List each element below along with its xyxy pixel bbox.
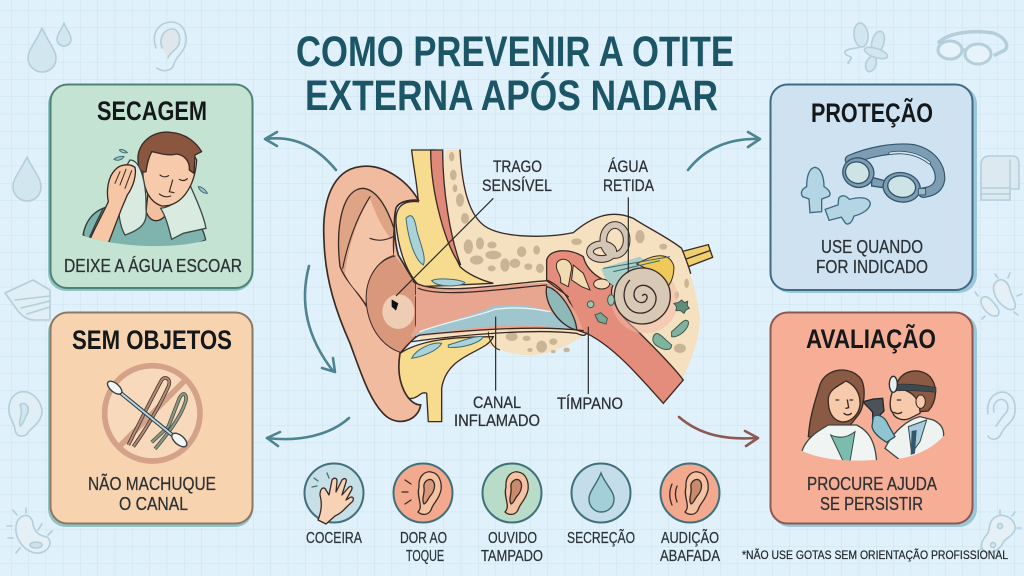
- label: trago sensível: [482, 157, 552, 195]
- label: água retida: RETIDA: [603, 176, 655, 195]
- ear anatomy diagram: [324, 150, 713, 422]
- illustration: goggles and earplugs: [801, 149, 940, 229]
- text: audição abafada: AUDIÇÃO: [661, 530, 719, 547]
- icon: small water drop: [57, 23, 71, 46]
- water highlight: [420, 308, 550, 332]
- panel: secagem: [48, 84, 253, 291]
- label: trago sensível: TRAGO: [493, 157, 542, 176]
- water in canal: [411, 305, 571, 337]
- icon: large water drop: [28, 28, 56, 72]
- title line 2: EXTERNA APÓS NADAR: [305, 71, 718, 120]
- label: trago sensível: SENSÍVEL: [482, 176, 552, 195]
- arrow: along the ear: [305, 266, 335, 372]
- canal lower wall: [400, 328, 587, 353]
- icon: left ear: [9, 392, 42, 436]
- title: [296, 28, 734, 120]
- symptom: audição abafada: [660, 464, 721, 565]
- icon: right bacteria: [975, 273, 1022, 319]
- icon: left water drop: [13, 157, 41, 201]
- muscle stripe: [431, 150, 461, 265]
- label: canal inflamado: INFLAMADO: [454, 411, 540, 430]
- lower cartilage: [412, 336, 483, 358]
- text: audição abafada: [660, 530, 721, 565]
- concha: [366, 256, 415, 352]
- arrow: to avaliação: [679, 417, 758, 446]
- patient: [808, 370, 864, 438]
- icon: prohibited cotton swab and hairpins: [105, 366, 200, 461]
- text: dor ao toque: TOQUE: [406, 548, 444, 565]
- title line 1: COMO PREVENIR A OTITE: [296, 28, 734, 76]
- doctor: [885, 417, 944, 460]
- middle ear cavity: [547, 251, 683, 403]
- panel: proteção: [770, 84, 977, 293]
- canal upper wall: [413, 281, 568, 297]
- temporal bone: [413, 150, 700, 403]
- symptom: secreção: [567, 464, 635, 547]
- caption: avaliação: PROCURE AJUDA: [807, 474, 937, 494]
- text: audição abafada: ABAFADA: [660, 548, 721, 565]
- label: tímpano: TÍMPANO: [557, 394, 623, 413]
- text: dor ao toque: [400, 530, 447, 565]
- label: água retida: [603, 157, 655, 195]
- arrow: to secagem: [265, 132, 336, 170]
- semicircular canals: [590, 225, 627, 259]
- canal opening tint: [411, 287, 568, 337]
- upper cartilage: [406, 216, 424, 265]
- earplug sideways: [823, 189, 874, 229]
- illustration: man drying ear with towel: [83, 132, 207, 253]
- bacteria: [587, 295, 689, 350]
- caption: proteção: [816, 237, 928, 277]
- icon: blocked ear: [505, 472, 528, 514]
- caption: proteção: USE QUANDO: [821, 237, 923, 257]
- nerve exit: [682, 245, 713, 267]
- goggles strap: [850, 149, 940, 193]
- caption: avaliação: SE PERSISTIR: [820, 494, 923, 514]
- vestibular nerve: [637, 256, 674, 288]
- panel: avaliação: [770, 312, 977, 527]
- ossicles: [556, 259, 572, 287]
- heading: proteção: PROTEÇÃO: [811, 97, 933, 128]
- pinna inner fold: [339, 188, 394, 307]
- tragus fold line: [366, 256, 400, 352]
- fold line: [343, 197, 393, 268]
- small fold under canal: [488, 332, 500, 350]
- text: dor ao toque: DOR AO: [400, 530, 447, 547]
- arrow: to proteção: [688, 132, 760, 170]
- caption: avaliação: [807, 474, 937, 514]
- symptom: ouvido tampado: [481, 464, 543, 565]
- upper fatty tissue: [396, 150, 493, 287]
- ear opening mark: [392, 299, 398, 311]
- text: ouvido tampado: OUVIDO: [488, 530, 537, 547]
- panel: sem objetos: [48, 312, 253, 527]
- retained water lines: [603, 257, 670, 272]
- vestibule: [602, 257, 657, 290]
- icon: left bacteria: [7, 508, 52, 553]
- arrow: to sem objetos: [267, 418, 349, 446]
- caption: secagem: DEIXE A ÁGUA ESCOAR: [64, 256, 242, 276]
- icon: drop: [589, 473, 614, 512]
- bone outline: [460, 150, 691, 273]
- icon: ear with pain marks: [402, 472, 441, 514]
- icon: ear with muffled sound: [670, 472, 708, 514]
- cochlea spiral: [624, 280, 656, 313]
- heading: secagem: SECAGEM: [97, 96, 207, 126]
- text: ouvido tampado: [481, 530, 543, 565]
- semicircular canals inner: [590, 225, 627, 259]
- icon: right towel: [981, 156, 1019, 200]
- eardrum: [546, 287, 577, 330]
- tragus: [382, 294, 414, 329]
- text: secreção: SECREÇÃO: [567, 530, 635, 547]
- earplug upright: [801, 167, 830, 213]
- icon: left towel: [5, 280, 50, 320]
- pink glow: [612, 267, 678, 333]
- icon: background ear top: [154, 22, 186, 71]
- symptom: coceira: [304, 464, 364, 547]
- icon: scratching hand: [312, 473, 353, 524]
- caption: sem objetos: [88, 473, 216, 514]
- bone pores: [449, 152, 689, 353]
- antihelix: [345, 198, 393, 303]
- caption: proteção: FOR INDICADO: [816, 257, 928, 277]
- icon: right bacteria bottom: [978, 510, 1021, 553]
- leader lines: [396, 197, 628, 394]
- icon: right ear: [988, 392, 1015, 439]
- pinna: [324, 166, 421, 421]
- ear canal: [400, 283, 583, 352]
- heading: sem objetos: SEM OBJETOS: [72, 325, 232, 355]
- upper duct: [432, 279, 465, 286]
- label: água retida: ÁGUA: [608, 157, 649, 176]
- symptom: dor ao toque: [394, 464, 452, 565]
- heading: avaliação: AVALIAÇÃO: [806, 323, 936, 354]
- text: coceira: COCEIRA: [306, 530, 363, 547]
- caption: sem objetos: NÃO MACHUQUE: [88, 473, 216, 494]
- label: canal inflamado: [454, 393, 540, 430]
- goggles frames: [839, 154, 926, 205]
- caption: sem objetos: O CANAL: [119, 494, 188, 514]
- icon: background goggles: [938, 32, 1007, 64]
- cochlea: [614, 268, 670, 324]
- icon: background earplugs: [845, 22, 889, 73]
- label: canal inflamado: CANAL: [473, 393, 521, 412]
- otoscope and hand: [863, 398, 884, 420]
- text: ouvido tampado: TAMPADO: [481, 548, 543, 565]
- lower fatty tissue: [397, 337, 493, 422]
- illustration: doctor examining patient with otoscope: [802, 370, 944, 462]
